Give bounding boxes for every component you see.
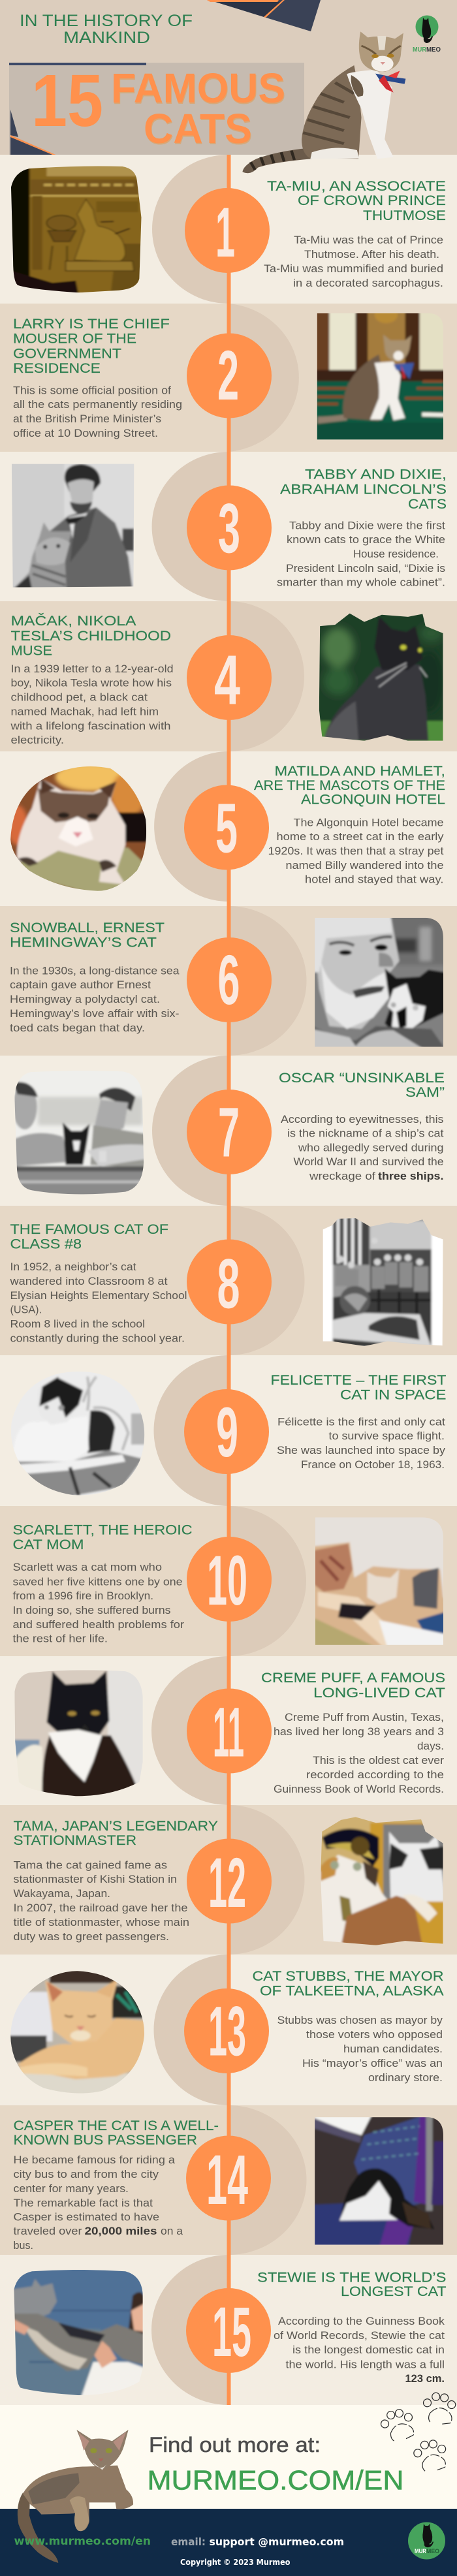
photo: Creme Puff black and white cat: [14, 1670, 142, 1797]
number badge 6: [187, 937, 272, 1022]
body 10: saved her five kittens one by one: [13, 1576, 183, 1588]
photo: Casper on bus seat: [315, 2117, 443, 2244]
body 11: Guinness Book of World Records.: [274, 1783, 444, 1795]
text: email: support @murmeo.com: [209, 2536, 344, 2548]
heading 1: [267, 179, 446, 223]
heading 2: LARRY IS THE CHIEF: [13, 317, 170, 332]
body 6: Hemingway a polydactyl cat.: [10, 994, 160, 1005]
heading: in the history of mankind: IN THE HISTORY OF: [20, 12, 193, 30]
photo: Lincoln with cat: [8, 460, 137, 591]
number badge 15: 15: [212, 2292, 251, 2371]
body 3: known cats to grace the White: [287, 534, 445, 546]
body 9: Félicette is the first and only cat: [277, 1417, 445, 1428]
logo: murmeo footer: MEO: [426, 2548, 439, 2555]
body 1: Ta-Miu was the cat of Prince: [294, 234, 443, 246]
timeline line: [227, 155, 231, 2405]
heading 15: STEWIE IS THE WORLD’S: [257, 2270, 447, 2285]
body 10: from a 1996 fire in Brooklyn.: [13, 1590, 153, 1602]
heading 1: TA-MIU, AN ASSOCIATE: [267, 179, 446, 194]
heading 15: [257, 2270, 447, 2299]
number badge 6: 6: [218, 940, 240, 1019]
body 14: center for many years.: [13, 2183, 129, 2195]
heading 6: HEMINGWAY’S CAT: [10, 935, 157, 950]
heading 8: THE FAMOUS CAT OF: [10, 1222, 168, 1237]
body 10: Scarlett was a cat mom who: [13, 1562, 162, 1573]
body 12: Wakayama, Japan.: [13, 1888, 110, 1900]
heading 3: ABRAHAM LINCOLN’S: [280, 482, 447, 497]
heading 14: KNOWN BUS PASSENGER: [13, 2133, 197, 2148]
photo: classroom with cat: [323, 1218, 443, 1346]
body 6: [10, 965, 180, 1034]
row 5: Matilda and Hamlet: [6, 760, 445, 896]
number badge 5: 5: [215, 789, 238, 867]
body 7: World War II and survived the: [294, 1156, 444, 1168]
title: famous cats: FAMOUS: [111, 65, 285, 112]
number badge 10: [187, 1537, 272, 1622]
body 10: the rest of her life.: [13, 1633, 108, 1645]
body 14: bus.: [13, 2240, 33, 2252]
heading 11: CREME PUFF, A FAMOUS: [261, 1671, 445, 1686]
text: find out more: Find out more at:: [149, 2433, 321, 2457]
body 14: He became famous for riding a: [13, 2154, 176, 2166]
body 15: of World Records, Stewie the cat: [274, 2330, 445, 2342]
body 3: [277, 520, 445, 589]
number badge 10: 10: [207, 1541, 247, 1620]
body 13: Stubbs was chosen as mayor by: [277, 2015, 443, 2026]
body 9: She was launched into space by: [277, 1445, 446, 1456]
body 4: In a 1939 letter to a 12-year-old: [10, 663, 174, 675]
row 2: Larry: [13, 306, 446, 443]
body 8: wandered into Classroom 8 at: [9, 1276, 168, 1287]
heading 8: CLASS #8: [10, 1236, 82, 1252]
number badge 14: 14: [206, 2140, 248, 2219]
number badge 3: [187, 486, 272, 571]
number badge 8: [187, 1239, 272, 1324]
body 14: The remarkable fact is that: [13, 2197, 153, 2209]
body 15: [274, 2316, 445, 2385]
body 10: In doing so, she suffered burns: [13, 1605, 171, 1616]
body 12: Tama the cat gained fame as: [13, 1859, 167, 1871]
logo: murmeo footer: MUR: [415, 2548, 426, 2555]
number badge 12: 12: [208, 1843, 246, 1922]
row 7: Oscar: [10, 1066, 445, 1199]
body 15: the world. His length was a full: [286, 2359, 445, 2371]
photo: Matilda ragdoll cat: [10, 766, 146, 891]
number badge 14: [186, 2136, 271, 2221]
body 2: at the British Prime Minister’s: [13, 413, 161, 425]
heading 13: OF TALKEETNA, ALASKA: [260, 1983, 444, 1999]
heading 4: [10, 614, 171, 658]
body 8: Elysian Heights Elementary School: [10, 1290, 187, 1302]
row 6: Snowball: [10, 915, 446, 1050]
heading 12: [13, 1819, 218, 1848]
body 11: [274, 1712, 445, 1795]
number badge 8: 8: [217, 1244, 240, 1323]
body 4: with a lifelong fascination with: [10, 721, 171, 732]
body 11: days.: [417, 1740, 444, 1752]
heading 2: MOUSER OF THE: [13, 332, 136, 346]
heading 9: FELICETTE – THE FIRST: [270, 1373, 447, 1388]
heading 10: SCARLETT, THE HEROIC: [13, 1522, 192, 1538]
text: copyright: Copyright © 2023 Murmeo: [180, 2558, 290, 2567]
row 8: Class #8: [9, 1214, 447, 1350]
photo: Tama the stationmaster: [321, 1817, 443, 1945]
row 12: Tama: [13, 1813, 447, 1949]
photo: Stubbs orange cat: [10, 1971, 144, 2093]
text: website: www.murmeo.com/en: [14, 2535, 151, 2548]
heading 3: CATS: [408, 497, 447, 512]
heading 7: [279, 1071, 445, 1100]
heading 5: ARE THE MASCOTS OF THE: [254, 778, 445, 793]
body 2: office at 10 Downing Street.: [13, 428, 158, 439]
text: murmeo url: MURMEO.COM/EN: [148, 2465, 403, 2495]
heading 12: TAMA, JAPAN’S LEGENDARY: [13, 1819, 218, 1834]
body 10: [13, 1562, 185, 1645]
title panel: [9, 59, 304, 159]
row 13: Stubbs: [6, 1966, 444, 2099]
body 1: Ta-Miu was mummified and buried: [264, 263, 443, 275]
big cat: Larry sitting on header edge: [242, 31, 405, 173]
title: famous cats: FAMOUS: [112, 66, 286, 113]
heading 13: [252, 1969, 444, 1999]
heading 6: SNOWBALL, ERNEST: [10, 920, 165, 935]
body 8: Room 8 lived in the school: [10, 1319, 145, 1330]
body 4: electricity.: [10, 734, 64, 746]
heading 14: CASPER THE CAT IS A WELL-: [13, 2118, 219, 2133]
body 11: has lived her long 38 years and 3: [274, 1726, 444, 1738]
heading 12: STATIONMASTER: [13, 1833, 136, 1848]
photo: Stewie long cat with woman: [14, 2270, 143, 2396]
photo: Scarlett with kittens: [313, 1514, 447, 1648]
photo: sarcophagus relief: [8, 165, 143, 295]
body 14: [13, 2154, 183, 2252]
row 11: Creme Puff: [10, 1667, 445, 1801]
body 4: boy, Nikola Tesla wrote how his: [10, 678, 172, 689]
row 4: Macak: [10, 608, 447, 746]
heading: in the history of mankind: [20, 12, 193, 47]
body 2: [13, 385, 182, 439]
body 11: This is the oldest cat ever: [313, 1755, 445, 1767]
photo: Larry on cabinet table: [317, 313, 443, 440]
logo: murmeo: MEO: [426, 46, 441, 54]
body 3: President Lincoln said, “Dixie is: [286, 563, 445, 574]
body 11: Creme Puff from Austin, Texas,: [285, 1712, 444, 1723]
heading 3: TABBY AND DIXIE,: [305, 467, 447, 482]
abyssinian cat: [18, 2430, 133, 2563]
body 4: [10, 663, 174, 746]
logo: murmeo: [413, 16, 441, 54]
number badge 4: [187, 635, 272, 720]
body 12: [13, 1859, 189, 1943]
number badge 9: [184, 1389, 269, 1474]
body 7: According to eyewitnesses, this: [281, 1114, 444, 1125]
body 14: Casper is estimated to have: [13, 2212, 159, 2223]
logo: murmeo footer: [408, 2522, 445, 2559]
title: famous cats: CATS: [144, 106, 253, 153]
photo: black cat in grass: [319, 614, 443, 741]
number badge 3: 3: [218, 488, 240, 568]
heading: in the history of mankind: MANKIND: [63, 29, 150, 47]
body 14: on a: [161, 2225, 183, 2237]
body 4: named Machak, had left him: [10, 706, 159, 718]
logo: murmeo: MUR: [413, 46, 427, 54]
body 5: [268, 817, 444, 885]
number badge 2: 2: [217, 336, 239, 415]
body 2: This is some official position of: [13, 385, 171, 397]
number badge 1: 1: [215, 193, 235, 272]
heading 9: CAT IN SPACE: [340, 1388, 447, 1402]
body 7: three ships.: [378, 1170, 444, 1182]
body 12: title of stationmaster, whose main: [13, 1917, 189, 1928]
heading 5: [254, 764, 445, 807]
number badge 5: [184, 785, 269, 870]
body 5: hotel and stayed that way.: [305, 873, 444, 885]
number badge 7: 7: [218, 1093, 240, 1171]
heading 13: CAT STUBBS, THE MAYOR: [252, 1969, 444, 1984]
body 13: His “mayor’s office” was an: [302, 2058, 443, 2069]
row 1: Ta-Miu: [8, 165, 446, 295]
body 10: and suffered health problems for: [13, 1619, 185, 1631]
body 6: captain gave author Ernest: [10, 979, 151, 991]
body 3: smarter than my whole cabinet”.: [277, 577, 445, 589]
number badge 1: [185, 188, 270, 273]
number badge 12: [187, 1838, 272, 1923]
body 7: wreckage of: [309, 1170, 375, 1182]
heading 6: [10, 920, 165, 950]
body 1: Thutmose. After his death.: [304, 249, 439, 260]
page background: header band: [0, 0, 457, 155]
body 8: constantly during the school year.: [10, 1333, 185, 1345]
heading 7: OSCAR “UNSINKABLE: [279, 1071, 445, 1086]
number badge 11: [187, 1688, 272, 1773]
row 14: Casper: [13, 2113, 447, 2252]
title number 15: 15: [31, 59, 103, 142]
body 1: in a decorated sarcophagus.: [293, 277, 443, 289]
row 3: Tabby and Dixie: [8, 460, 447, 591]
heading 4: MUSE: [10, 644, 52, 658]
body 3: Tabby and Dixie were the first: [289, 520, 445, 531]
body 14: traveled over: [13, 2225, 82, 2237]
body 6: Hemingway’s love affair with six-: [10, 1008, 179, 1020]
heading 5: MATILDA AND HAMLET,: [274, 764, 445, 779]
body 7: who allegedly served during: [298, 1142, 444, 1154]
title: famous cats: [111, 65, 286, 153]
body 5: home to a street cat in the early: [277, 831, 444, 843]
body 11: recorded according to the: [306, 1769, 444, 1781]
heading 2: RESIDENCE: [13, 361, 101, 376]
header block: [9, 0, 441, 159]
body 12: duty was to greet passengers.: [13, 1931, 169, 1943]
number badge 13: [184, 1988, 269, 2073]
heading 11: LONG-LIVED CAT: [313, 1686, 445, 1701]
body 8: [9, 1261, 187, 1345]
body 9: France on October 18, 1963.: [301, 1459, 445, 1471]
body 3: House residence.: [353, 548, 439, 560]
body 6: toed cats began that day.: [10, 1022, 145, 1034]
heading 11: [261, 1671, 445, 1701]
body 14: 20,000 miles: [85, 2225, 157, 2237]
body 13: [277, 2015, 443, 2084]
heading 15: LONGEST CAT: [341, 2284, 447, 2299]
heading 5: ALGONQUIN HOTEL: [301, 793, 445, 807]
heading 7: SAM”: [405, 1085, 445, 1100]
number badge 15: [186, 2288, 271, 2373]
body 14: city bus to and from the city: [13, 2169, 159, 2180]
call to action band: [0, 2390, 457, 2509]
number badge 11: 11: [213, 1692, 244, 1772]
body 12: stationmaster of Kishi Station in: [13, 1874, 177, 1885]
number badge 2: [187, 333, 272, 418]
title: famous cats: CATS: [144, 105, 252, 152]
number badge 4: 4: [214, 640, 240, 719]
number badge 7: [187, 1090, 272, 1174]
body 9: [277, 1417, 446, 1471]
photo: Felicette in harness: [11, 1372, 145, 1495]
body 15: is the longest domestic cat in: [292, 2344, 445, 2356]
footer band: [0, 2430, 457, 2576]
body 5: named Billy wandered into the: [286, 860, 444, 872]
body 4: childhood pet, a black cat: [10, 692, 148, 704]
body 7: [281, 1114, 444, 1182]
heading 1: THUTMOSE: [363, 208, 446, 223]
text: email: email:: [171, 2536, 206, 2548]
body 5: 1920s. It was then that a stray pet: [268, 845, 444, 857]
body 6: In the 1930s, a long-distance sea: [10, 965, 180, 977]
body 8: In 1952, a neighbor’s cat: [10, 1261, 136, 1273]
body 7: is the nickname of a ship’s cat: [287, 1128, 444, 1140]
body 2: all the cats permanently residing: [13, 399, 182, 411]
heading 10: CAT MOM: [13, 1537, 84, 1552]
body 13: ordinary store.: [368, 2072, 443, 2084]
heading 9: [270, 1373, 447, 1402]
heading 2: [13, 317, 170, 376]
half circles behind timeline: [151, 155, 307, 2405]
heading 8: [10, 1222, 168, 1252]
body 12: In 2007, the railroad gave her the: [13, 1902, 188, 1914]
body 13: human candidates.: [343, 2043, 443, 2055]
icons: paw prints: [379, 2390, 457, 2472]
body 15: According to the Guinness Book: [278, 2316, 445, 2327]
body 13: those voters who opposed: [306, 2029, 443, 2041]
row 10: Scarlett: [13, 1514, 447, 1648]
body 1: [264, 234, 443, 289]
number badge 9: 9: [216, 1392, 238, 1471]
decorative top triangles: [207, 0, 321, 31]
body 15: 123 cm.: [405, 2373, 445, 2385]
heading 10: [13, 1522, 192, 1552]
heading 2: GOVERNMENT: [13, 346, 121, 362]
number badge 13: 13: [208, 1991, 246, 2071]
heading 3: [280, 467, 447, 512]
photo: Hemingway with kitten: [312, 915, 446, 1050]
heading 1: OF CROWN PRINCE: [298, 193, 446, 208]
body 5: The Algonquin Hotel became: [294, 817, 444, 829]
body 8: (USA).: [10, 1304, 42, 1316]
heading 14: [13, 2118, 219, 2148]
row 15: Stewie: [10, 2265, 447, 2400]
heading 4: MAČAK, NIKOLA: [10, 614, 136, 629]
row 9: Felicette: [6, 1367, 447, 1500]
body 9: to survive space flight.: [329, 1430, 445, 1442]
photo: sailors with Oscar: [14, 1071, 144, 1195]
heading 4: TESLA’S CHILDHOOD: [10, 629, 171, 644]
